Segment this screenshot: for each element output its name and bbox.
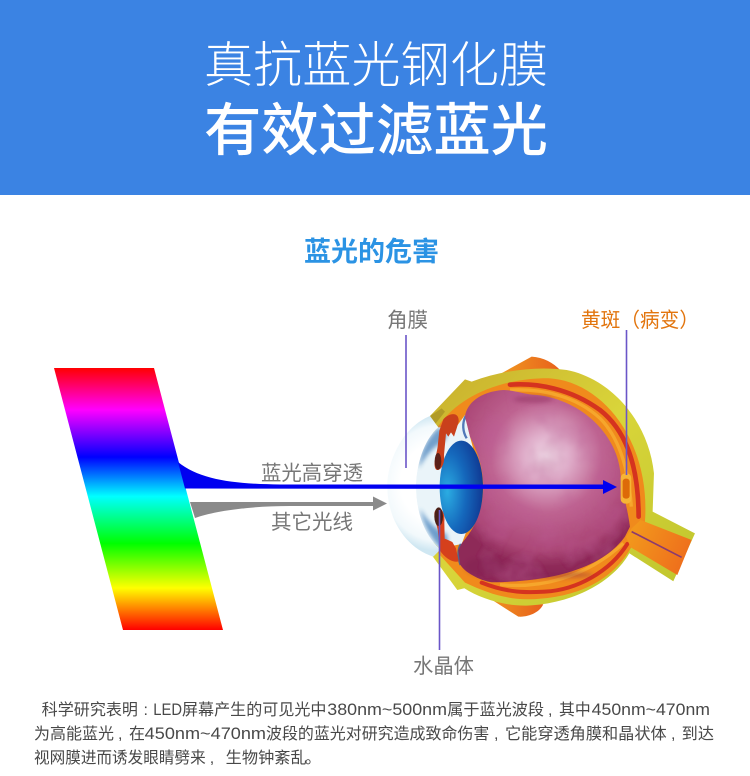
body paragraph: 科学研究表明	[42, 701, 138, 719]
body paragraph	[34, 700, 714, 767]
body paragraph: 生物钟紊乱	[226, 749, 307, 767]
eye cross-section	[387, 357, 695, 617]
upper eye muscle	[498, 357, 561, 375]
sclera	[430, 368, 695, 606]
body paragraph: 450nm~470nm	[145, 724, 266, 743]
other light beam	[190, 496, 387, 518]
body paragraph: 其中	[559, 701, 591, 719]
body paragraph: 视网膜进而诱发眼睛劈来	[34, 748, 206, 767]
title line 2: 有效过滤蓝光	[204, 85, 548, 167]
macula lesion	[623, 479, 630, 499]
lower iris shading	[420, 508, 448, 548]
body paragraph: :	[144, 702, 148, 719]
vitreous dark edges	[465, 396, 593, 578]
upper iris and ciliary body	[435, 414, 459, 470]
body paragraph: 380nm~500nm	[327, 700, 447, 719]
body paragraph: ,	[494, 726, 498, 743]
spectrum parallelogram	[54, 368, 223, 630]
label: crystalline lens: 水晶体	[413, 655, 474, 678]
callout line: lens	[438, 510, 440, 650]
upper iris bulb	[435, 453, 441, 470]
body paragraph: 波段的蓝光对研究造成致命伤害	[266, 725, 489, 743]
body paragraph: ,	[671, 726, 675, 743]
section heading: 蓝光的危害	[304, 237, 439, 267]
vitreous body	[458, 390, 630, 582]
sclera shadow wedge	[430, 408, 445, 424]
body paragraph: 。	[305, 750, 321, 767]
body paragraph: 屏幕产生的可见光中	[182, 701, 326, 719]
lower eye muscle	[482, 593, 543, 617]
body paragraph: ,	[548, 702, 552, 719]
optic nerve	[626, 520, 692, 575]
label: blue light penetration: 蓝光高穿透	[261, 462, 363, 485]
lower iris stalk and ciliary body	[434, 509, 459, 562]
callout line: cornea	[405, 335, 407, 468]
cornea	[387, 416, 441, 557]
body paragraph: 属于蓝光波段	[447, 701, 544, 719]
title line 1: 真抗蓝光钢化膜	[204, 26, 548, 97]
header banner	[0, 0, 750, 195]
body paragraph: 它能穿透角膜和晶状体	[505, 725, 667, 743]
blue light beam	[178, 462, 617, 494]
label: other light: 其它光线	[271, 511, 353, 534]
body paragraph: 为高能蓝光	[34, 725, 114, 743]
choroid red stripes	[482, 384, 639, 592]
body paragraph: 在	[129, 725, 145, 743]
upper iris shading	[419, 427, 447, 468]
callout line: macula	[626, 330, 628, 475]
body paragraph: LED	[153, 700, 182, 719]
body paragraph: ,	[118, 726, 122, 743]
crystalline lens	[440, 441, 483, 534]
lower iris bulb	[434, 507, 443, 526]
chamber blue rims	[458, 416, 467, 565]
body paragraph: 到达	[682, 725, 714, 743]
anterior chamber	[416, 415, 483, 548]
label: macula lesion: 黄斑（病变）	[581, 309, 699, 332]
nerve centre line	[632, 532, 682, 557]
body paragraph: ,	[210, 750, 214, 767]
macula	[621, 473, 631, 504]
retina pale orange	[500, 390, 631, 585]
label: cornea: 角膜	[387, 309, 428, 332]
choroid orange layer	[438, 378, 645, 599]
body paragraph: 450nm~470nm	[592, 700, 710, 719]
